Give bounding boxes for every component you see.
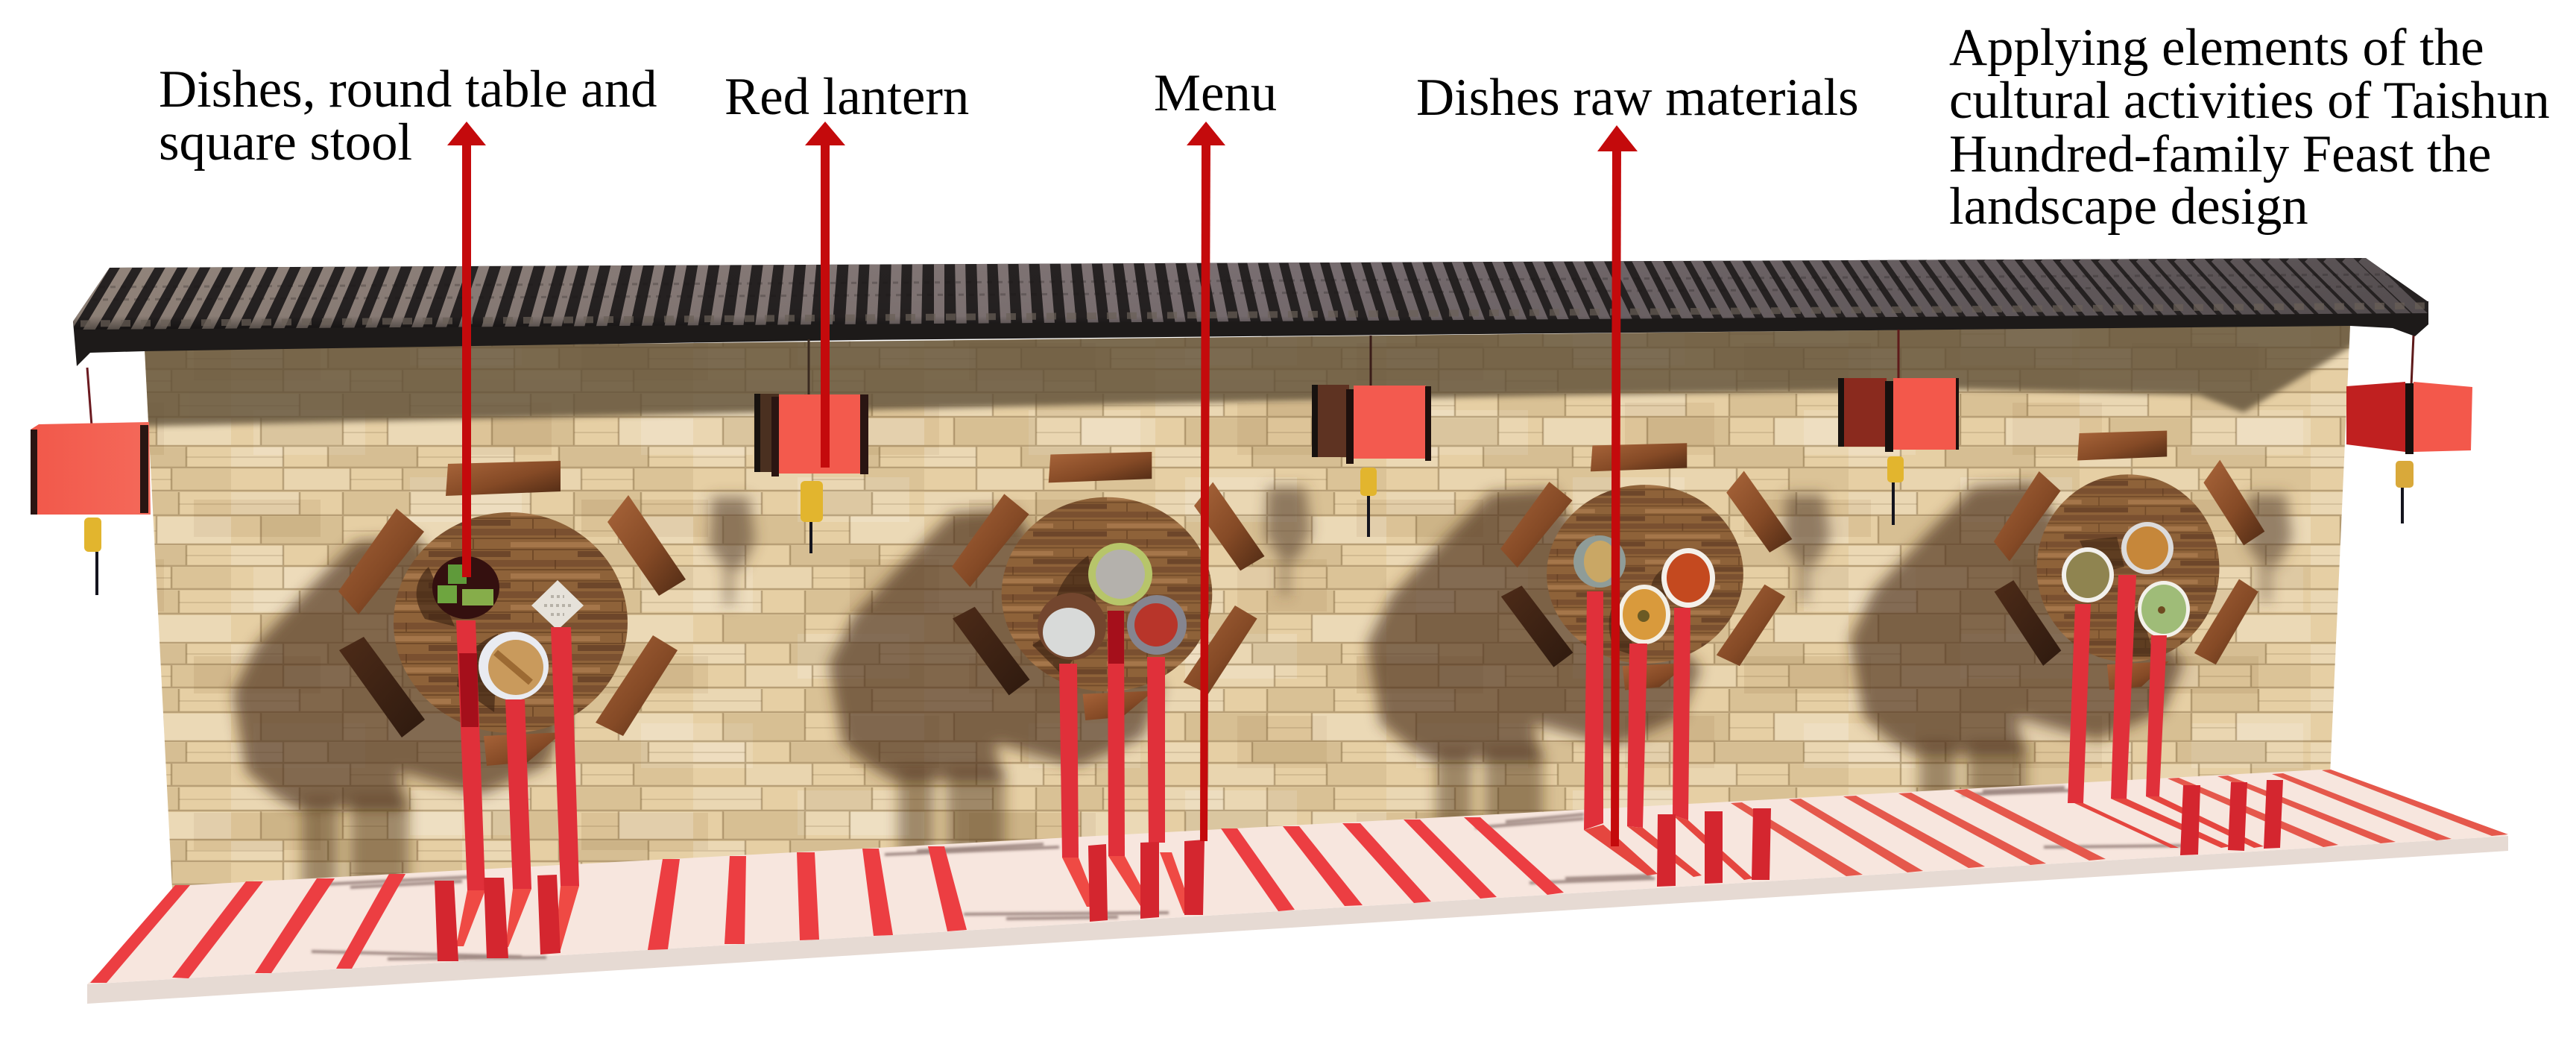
label: menu: Menu: [1154, 64, 1277, 122]
arrow: dishes raw materials: [1597, 125, 1638, 846]
arrow: red lantern: [805, 122, 845, 468]
lantern 2: [754, 339, 868, 553]
dish: red stew: [1661, 548, 1715, 608]
arrow: dishes, round table and stool: [447, 122, 486, 577]
lantern 3: [1312, 336, 1431, 537]
dish: rolls on plate: [1573, 535, 1626, 588]
dish: fried balls: [2121, 522, 2174, 574]
label: applying elements: landscape design: [1949, 177, 2308, 236]
lantern far left: [31, 368, 151, 595]
standing red blocks at the floor: [435, 780, 2283, 961]
table 2 with dishes: [952, 452, 1264, 720]
ground slab: [87, 770, 2508, 1004]
label: red lantern: Red lantern: [724, 68, 969, 126]
arrow: menu: [1187, 122, 1225, 841]
label: applying elements: cultural activities of Taishun: [1949, 72, 2550, 130]
wall: stone brick: [134, 313, 2363, 889]
dish: vegetables on white plate: [2062, 547, 2114, 603]
table 4 with dishes: [1994, 431, 2264, 690]
dish: red food on plate: [1127, 595, 1187, 655]
cast shadows of tables and lanterns on the wall: [233, 482, 2292, 891]
label: applying elements: Hundred-family Feast the: [1949, 125, 2491, 183]
label: applying elements: Applying elements of the: [1949, 19, 2484, 77]
dish: white dumplings: [531, 580, 584, 630]
table 3 with dishes: [1500, 443, 1792, 691]
red ribbons running from dishes to floor: [456, 575, 2264, 950]
dish: roast chicken on plate: [479, 632, 549, 700]
dish: green food on dark plate: [432, 556, 499, 619]
label: dishes raw materials: Dishes raw materials: [1416, 69, 1859, 127]
lantern 4: [1838, 330, 1959, 525]
floor stripes: [90, 770, 2508, 983]
dish: yellow soup: [1618, 585, 1670, 644]
table 1: round table and stools with dishes: [338, 461, 686, 766]
roof: dark tiled eave: [64, 254, 2440, 366]
dish: grey bowl: [1038, 593, 1106, 660]
dish: green bowl: [1088, 543, 1152, 606]
label: dishes, round table and square stool: square stool: [159, 113, 412, 172]
lantern far right: [2346, 336, 2472, 523]
dish: green soup: [2138, 581, 2190, 638]
label: dishes, round table and square stool: Dishes, round table and: [159, 60, 657, 119]
